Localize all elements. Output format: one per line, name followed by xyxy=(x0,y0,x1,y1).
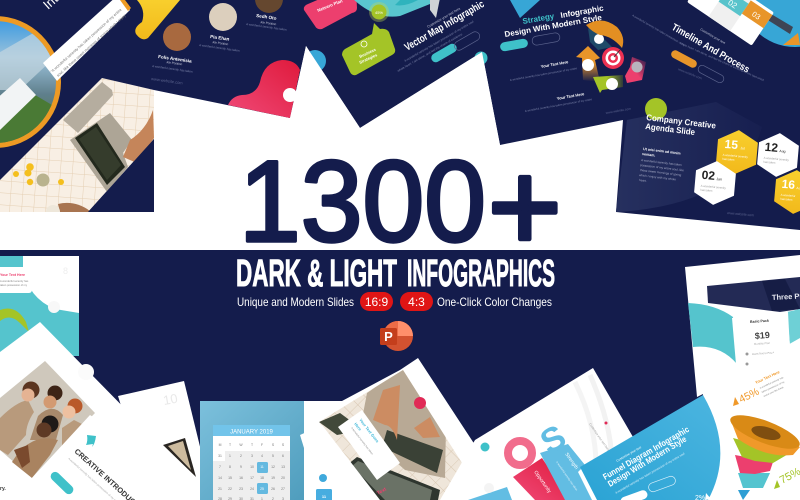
panel: strategy slide: A wonderful serenity has taken possession of my entire xyxy=(509,66,578,82)
card: basic pack: Monthly Plan xyxy=(754,341,771,346)
panel: calendar xyxy=(200,401,304,500)
panel: calendar: 21 xyxy=(218,487,222,491)
panel: calendar: 16 xyxy=(239,476,243,480)
hexagon: 12 Aug: has taken xyxy=(763,160,776,165)
card: basic pack: Basic Pack xyxy=(750,319,769,324)
card: your text here: A wonderful serenity has xyxy=(0,279,29,283)
panel: SWOT slide xyxy=(440,368,640,500)
card: your text goes here: Here xyxy=(353,422,363,432)
panel: calendar: 17 xyxy=(250,476,254,480)
panel: funnel blue slide: Funnel Diagram Infographic xyxy=(601,424,691,482)
panel: calendar: 3 xyxy=(251,454,253,458)
card: basic pack xyxy=(732,312,790,376)
panel: laptop photo xyxy=(0,78,154,212)
navy corner xyxy=(88,139,154,212)
hexagon: 15 Jul xyxy=(715,128,759,176)
panel: strategy slide: A wonderful serenity has taken possession of my entire xyxy=(524,97,593,113)
pill: 4:3 xyxy=(400,292,433,311)
panel: strategy slide: www.website.com xyxy=(605,107,631,115)
panel: calendar: M xyxy=(219,443,222,447)
panel: agenda photo xyxy=(616,98,762,217)
panel: team members: Pia Ehan xyxy=(210,34,230,42)
shape: blue S: S xyxy=(534,418,573,462)
hexagon: 12 Aug: A wonderful serenity xyxy=(764,156,790,162)
button: teal xyxy=(499,38,529,52)
panel: funnel blue slide: Design With Modern Style xyxy=(606,434,688,489)
panel: white slides lower-left xyxy=(0,322,213,500)
panel: team members: Job Position xyxy=(166,60,183,66)
bar: opportunity xyxy=(513,458,570,500)
icon: blue half circle xyxy=(304,50,326,72)
panel: strategy slide: Infographic xyxy=(560,3,605,20)
card: basic pack: Insert Text In Pos A xyxy=(752,350,775,356)
button: orange xyxy=(670,49,698,69)
panel: strategy slide: Your Text Here xyxy=(556,91,585,101)
top dark collage background xyxy=(0,0,800,230)
panel: strategy slide xyxy=(499,0,631,115)
shape: pink O xyxy=(508,441,532,465)
panel: agenda photo: which I enjoy with my whole xyxy=(639,173,676,182)
hexagon: 16 Aug: 16 xyxy=(781,177,796,192)
hexagon: 02 Jan: 02 xyxy=(701,168,716,183)
heading: dark and light: DARK & LIGHT xyxy=(236,253,397,295)
panel: process table: 03 xyxy=(750,9,762,22)
panel: calendar: 18 xyxy=(260,476,264,480)
panel: timeline slide xyxy=(632,13,765,84)
panel: agenda photo: veniam. xyxy=(642,152,656,158)
panel: calendar: 26 xyxy=(271,487,275,491)
heading: vector map slide xyxy=(396,0,487,73)
icon: green curved arrow xyxy=(0,308,29,332)
panel: calendar: 8 xyxy=(229,465,231,469)
hexagon: 15 Jul: Jul xyxy=(740,146,745,151)
panel: bottom dark band xyxy=(0,250,800,500)
panel: funnel blue slide xyxy=(580,395,720,500)
icon: yellow blob xyxy=(135,0,180,39)
panel: calendar: 4 xyxy=(261,454,263,458)
panel: agenda photo: A wonderful serenity has taken xyxy=(641,158,682,167)
panel: building photo slide xyxy=(0,0,61,148)
panel: calendar: S xyxy=(272,443,275,447)
title: 1300+: + xyxy=(488,136,562,277)
panel: calendar: T xyxy=(229,443,231,447)
hexagon: 02 Jan: has taken xyxy=(700,188,713,193)
quote strip xyxy=(43,0,131,81)
button: teal learn more xyxy=(430,42,458,64)
panel: white slides lower-left: 10 xyxy=(162,391,179,408)
chart: funnel diagram xyxy=(727,408,800,500)
button: outline xyxy=(697,64,725,84)
panel: agenda photo: possession of my entire soul, like xyxy=(640,163,684,172)
panel: timeline slide: www.website.com xyxy=(678,67,703,81)
icon: powerpoint logo: P xyxy=(384,329,393,344)
quote strip: soul, like these sweet mornings of spring which I enjoy xyxy=(56,14,127,78)
small blue tile: 11 xyxy=(322,494,327,499)
hexagon: 15 Jul: 15 xyxy=(724,137,739,152)
panel: timeline slide: Customize your text xyxy=(700,27,726,45)
small blue tile: Text xyxy=(376,486,388,497)
chart: circular arrow target xyxy=(576,20,646,93)
small blue tile xyxy=(300,425,388,500)
hexagon: 12 Aug: Aug xyxy=(779,149,786,154)
panel: teal slide left xyxy=(0,256,79,356)
hexagon: 12 Aug: 12 xyxy=(764,140,779,155)
panel: laptop overhead photo xyxy=(319,368,462,500)
panel: team members: A wonderful serenity has taken xyxy=(152,64,193,74)
panel: calendar: 1 xyxy=(229,454,231,458)
card: green business speech bubble: Strategies xyxy=(358,52,379,65)
icon: pink arrow xyxy=(625,57,646,83)
hexagon: 16 Aug xyxy=(773,168,800,216)
panel: team photo xyxy=(0,361,95,478)
panel: calendar: 10 xyxy=(250,465,254,469)
hexagon: 15 Jul: has taken xyxy=(722,157,735,162)
panel: pricing slide xyxy=(685,255,800,397)
icon: green circle xyxy=(645,98,667,120)
hexagon: 16 Aug: A wonderful xyxy=(781,193,796,198)
quote strip: "A wonderful serenity has taken possession of my entire xyxy=(50,8,123,74)
card: your text here: Your Text Here xyxy=(0,273,25,277)
hexagon: 12 Aug xyxy=(756,131,800,179)
panel: calendar: 23 xyxy=(239,487,243,491)
button: outline learn more xyxy=(453,30,481,52)
panel: team members xyxy=(151,0,287,86)
panel: team members: Folis Antemisia xyxy=(158,54,192,64)
panel: funnel blue slide: A wonderful serenity has taken possession of my entire soul xyxy=(614,451,686,495)
panel: SWOT slide: Customize your text here xyxy=(588,422,611,452)
panel: agenda photo: these sweet mornings of spring xyxy=(640,168,682,177)
panel: calendar: 22 xyxy=(228,487,232,491)
panel: agenda photo: heart. xyxy=(639,178,647,183)
panel: team members: Job Position xyxy=(260,20,277,26)
heading: vector map slide: whole heart. I am alone, and feel the charm of existence xyxy=(396,32,463,73)
panel: strategy slide: Your Text Here xyxy=(540,59,569,69)
subtitle: right: One-Click Color Changes xyxy=(437,295,552,309)
panel: calendar: 15 xyxy=(228,476,232,480)
panel: creative intro slide xyxy=(0,415,215,500)
bar: strength xyxy=(540,444,592,500)
card: basic pack: $19 xyxy=(754,330,770,341)
panel: teal slide left: 8 xyxy=(63,266,68,276)
panel: calendar: JANUARY 2019 xyxy=(230,430,274,436)
panel: calendar: 9 xyxy=(240,465,242,469)
panel: calendar: 19 xyxy=(271,476,275,480)
hexagon: 16 Aug: has taken xyxy=(780,197,793,202)
button: teal learn more xyxy=(49,470,75,496)
card: your text goes here: A wonderful serenity has taken xyxy=(350,427,374,456)
white wedge xyxy=(360,52,500,240)
panel: calendar: 7 xyxy=(219,465,221,469)
icon: powerpoint logo xyxy=(380,321,413,351)
heading: agenda: Company Creative xyxy=(646,112,717,131)
panel: calendar: 27 xyxy=(281,487,285,491)
panel: calendar: 25 xyxy=(260,487,264,491)
card: your text goes here xyxy=(338,410,400,480)
panel: team members: A wonderful serenity has taken xyxy=(246,22,287,32)
panel: process table xyxy=(687,0,800,47)
card: pink strategy xyxy=(304,0,357,29)
panel: calendar: S xyxy=(282,443,285,447)
panel: calendar: 6 xyxy=(282,454,284,458)
panel: agenda photo: Ut wisi enim ad minim xyxy=(643,147,681,156)
heading: vector map slide: Customize your text here xyxy=(426,7,461,29)
panel: calendar: 12 xyxy=(271,465,275,469)
hexagon: 02 Jan xyxy=(693,159,737,207)
card: your text goes here: Your Text Goes xyxy=(358,418,380,444)
label: 45 percent: A wonderful serenity has xyxy=(759,376,785,390)
bar: opportunity: Opportunity xyxy=(532,470,552,495)
panel: funnel slide white xyxy=(700,338,800,500)
panel: calendar: 24 xyxy=(250,487,254,491)
panel: calendar: 20 xyxy=(281,476,285,480)
panel: agenda photo: www.website.com xyxy=(727,211,754,217)
icon: green arrow xyxy=(593,75,623,93)
blue wedge xyxy=(468,487,512,500)
button: outline learn more xyxy=(647,475,677,493)
bar: strength: A wonderful serenity has taken xyxy=(555,460,579,492)
panel: funnel blue slide: Customize your text xyxy=(616,445,642,463)
panel: team members: Job Position xyxy=(212,40,229,46)
icon: trophy xyxy=(86,435,96,447)
panel: timeline slide: whole heart. I am alone, and feel the charm of existence in this spot which xyxy=(680,41,765,82)
card: green business speech bubble: Business xyxy=(358,47,377,59)
label: 45 percent: taken possession of my xyxy=(761,380,786,394)
hexagon: 02 Jan: A wonderful serenity xyxy=(701,184,727,190)
dark triangle photo xyxy=(163,438,196,477)
panel: calendar: F xyxy=(261,443,263,447)
label: 45 percent: Your Text Here xyxy=(755,370,780,385)
label: 45 percent: entire soul like these xyxy=(763,386,785,398)
panel: calendar: 13 xyxy=(281,465,285,469)
bar: strength: Strength xyxy=(563,452,579,471)
card: green business speech bubble xyxy=(342,23,395,75)
panel: timeline slide: A wonderful serenity has taken possession of my xyxy=(632,13,686,47)
button: outline xyxy=(531,32,561,46)
button: white xyxy=(619,489,649,500)
panel: calendar: 31 xyxy=(218,454,222,458)
world map disc xyxy=(352,0,445,22)
panel: calendar: 2 xyxy=(240,454,242,458)
panel: creative intro slide: ry. xyxy=(0,486,6,492)
label: 45 percent xyxy=(733,370,786,406)
panel: calendar: W xyxy=(239,443,243,447)
card: 75 percent xyxy=(772,457,800,500)
shape: red wave blob xyxy=(228,60,300,118)
panel: agenda photo: Agenda Slide xyxy=(645,121,696,137)
label: 45 percent: 45% xyxy=(737,386,761,406)
pill: 16:9 xyxy=(360,292,393,311)
panel: timeline slide: Timeline And Process xyxy=(670,22,752,76)
panel: strategy slide: Design With Modern Style xyxy=(504,13,603,39)
dot: teal xyxy=(480,442,490,452)
panel: white slide centre xyxy=(304,358,480,500)
panel: strategy slide: Strategy xyxy=(522,11,555,26)
icon: target xyxy=(602,47,624,69)
panel: team members: Sedh Oto xyxy=(256,13,277,21)
icon: orange arrow xyxy=(576,46,600,82)
panel: team members: www.website.com xyxy=(151,76,184,86)
icon: green percent badge: 45% xyxy=(375,10,383,15)
panel: calendar: 11 xyxy=(260,465,264,469)
icon: red dot xyxy=(414,397,426,409)
subtitle: left: Unique and Modern Slides xyxy=(237,295,354,309)
pill: 4:3: 4:3 xyxy=(408,295,425,309)
white peak over collage xyxy=(290,46,360,128)
panel: calendar: T xyxy=(251,443,253,447)
hexagon: 15 Jul: A wonderful serenity xyxy=(723,153,749,159)
panel: calendar: 14 xyxy=(218,476,222,480)
card: your text here: taken possession of my xyxy=(0,283,28,287)
panel: calendar: 5 xyxy=(272,454,274,458)
heading: infographics: INFOGRAPHICS xyxy=(407,253,555,295)
pill: 16:9: 16:9 xyxy=(365,295,389,309)
heading: vector map slide: A wonderful serenity has taken possession of my entire soul xyxy=(404,19,475,63)
card: your text here xyxy=(0,267,32,293)
hexagon: 02 Jan: Jan xyxy=(716,177,722,182)
title: 1300+: 1300 xyxy=(239,138,486,266)
teal dot sliver xyxy=(474,52,488,64)
panel: team members: A wonderful serenity has taken xyxy=(199,43,240,53)
